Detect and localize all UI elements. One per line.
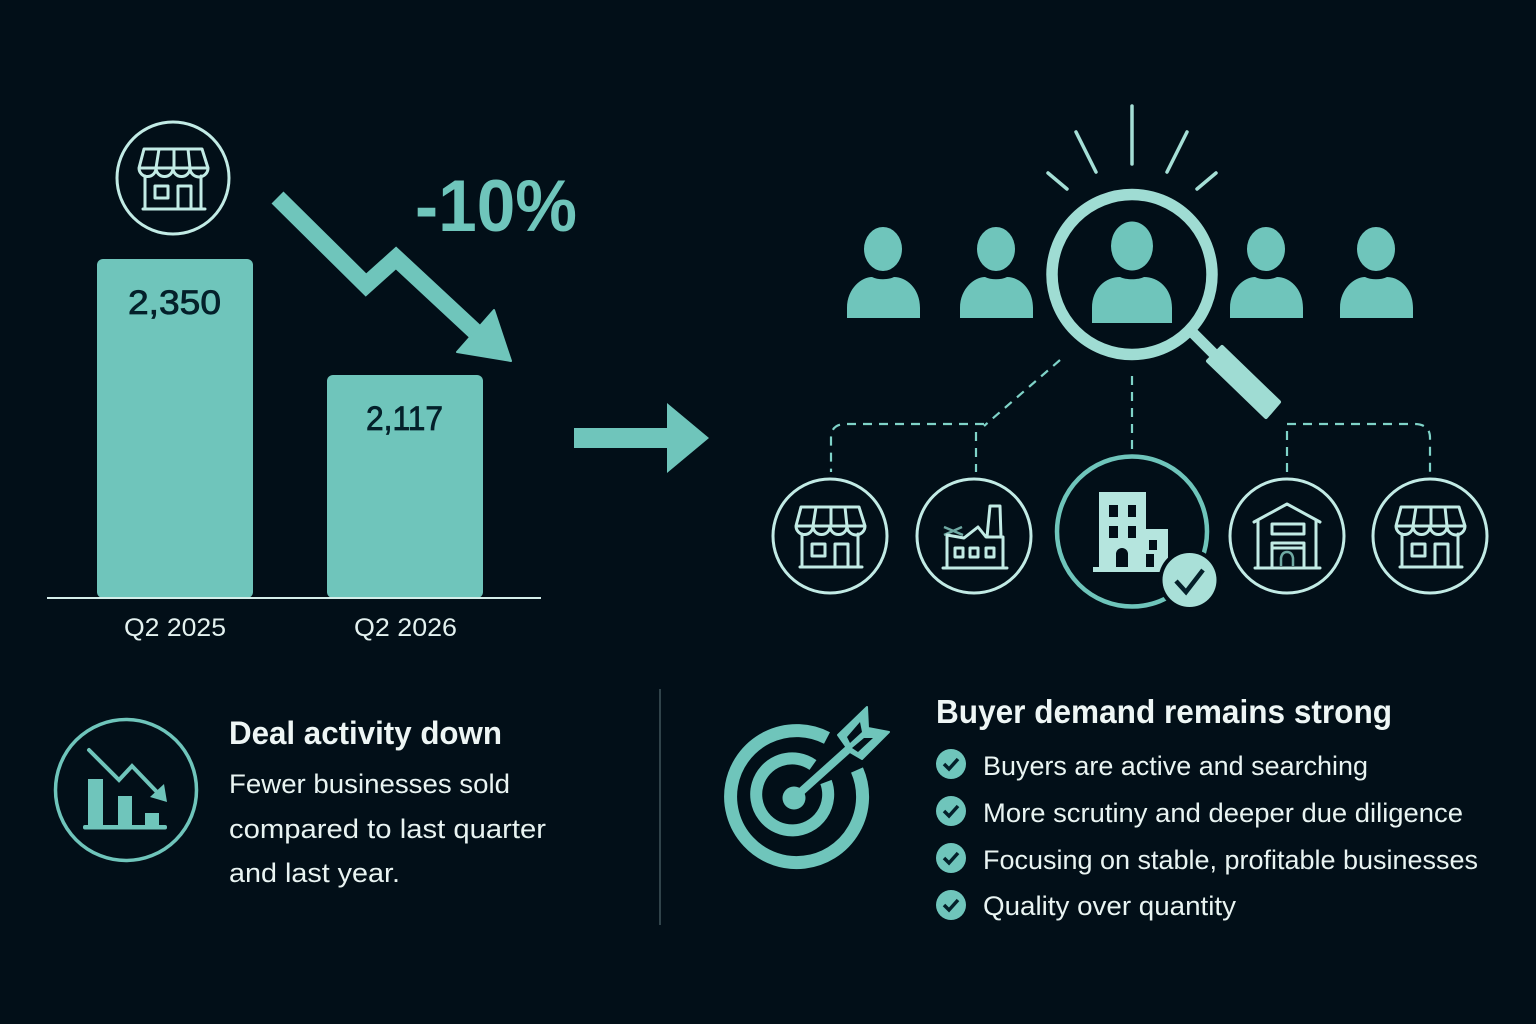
arrow: downward trend	[278, 198, 511, 361]
value: 2,117: 2,117	[366, 400, 443, 438]
icon: highlighted office building with check	[1057, 456, 1220, 611]
dashed connectors	[831, 360, 1430, 472]
text block: deal activity description: compared to last quarter	[229, 814, 546, 844]
chart baseline	[47, 597, 541, 599]
icon: warehouse	[1230, 479, 1344, 593]
bar: Q2 2026	[327, 375, 483, 598]
icon: declining bar chart	[56, 720, 196, 860]
text block: deal activity description: Fewer businesses sold	[229, 769, 510, 799]
bar: Q2 2025	[97, 259, 253, 598]
person 1	[847, 227, 920, 318]
icon: factory	[917, 479, 1031, 593]
panel: buyer search	[773, 106, 1487, 611]
icon: magnifying glass over person	[1052, 194, 1279, 417]
label: Q2 2025: Q2 2025	[124, 614, 226, 642]
icon: storefront in circle	[117, 122, 229, 234]
person 2	[960, 227, 1033, 318]
person 3	[1230, 227, 1303, 318]
value: -10%: -10%	[415, 166, 577, 247]
list item 2: More scrutiny and deeper due diligence	[983, 798, 1463, 828]
label: Q2 2026: Q2 2026	[354, 614, 457, 642]
icon: target with arrow	[731, 707, 889, 863]
heading: Buyer demand remains strong: Buyer demand remains strong	[936, 693, 1392, 730]
list item 4: Quality over quantity	[983, 891, 1237, 921]
divider	[659, 689, 661, 925]
text block: deal activity description	[229, 769, 546, 888]
list item 1: Buyers are active and searching	[983, 751, 1368, 781]
icon: storefront left	[773, 479, 887, 593]
panel: deal activity	[56, 715, 546, 888]
panel: bar chart of businesses sold	[47, 122, 577, 642]
arrow: transition to right panel	[574, 403, 709, 473]
value: 2,350: 2,350	[128, 284, 221, 322]
list item 3: Focusing on stable, profitable businesses	[983, 845, 1478, 875]
panel: buyer demand	[731, 693, 1478, 921]
heading: Deal activity down: Deal activity down	[229, 715, 502, 751]
text block: deal activity description: and last year.	[229, 858, 400, 888]
person 4	[1340, 227, 1413, 318]
icon: storefront right	[1373, 479, 1487, 593]
attention rays	[1048, 106, 1216, 189]
